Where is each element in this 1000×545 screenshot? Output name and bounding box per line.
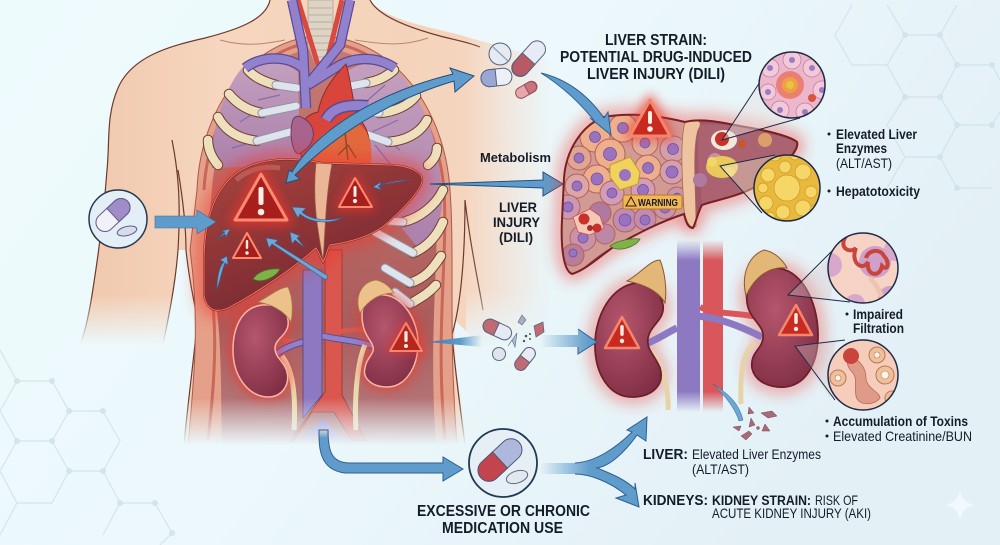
warning badge xyxy=(623,195,682,209)
warning triangle: magnified liver xyxy=(629,98,671,136)
skin: arms and shoulders xyxy=(80,0,550,445)
hexagon pattern: top right xyxy=(835,5,1000,191)
right panel adrenal right xyxy=(744,250,787,296)
text: liver outcome: LIVER: xyxy=(643,446,688,463)
liver in body xyxy=(204,159,422,310)
heart xyxy=(291,64,371,172)
text: liver effects: Hepatotoxicity xyxy=(836,183,920,199)
label: liver injury: LIVER xyxy=(499,199,537,215)
trachea xyxy=(308,0,333,66)
right panel ureters xyxy=(652,343,755,410)
kidney right glow xyxy=(362,295,418,387)
damaged hepatocytes xyxy=(573,209,604,235)
inset: tubule xyxy=(795,340,899,410)
text: liver outcome: (ALT/AST) xyxy=(692,461,749,477)
great veins fill xyxy=(245,0,395,108)
arrow: bottom elbow xyxy=(319,430,463,481)
text: toxins xyxy=(826,413,972,444)
text: kidney outcome xyxy=(643,492,871,521)
text: impaired filtration: Impaired xyxy=(853,306,903,322)
text: liver effects: Enzymes xyxy=(836,140,887,156)
pills: fragmented xyxy=(481,315,544,373)
text: liver effects: (ALT/AST) xyxy=(836,155,892,171)
warning badge: WARNING xyxy=(638,198,678,209)
text: toxins: Elevated Creatinine/BUN xyxy=(833,428,972,444)
great veins xyxy=(245,0,395,108)
lung right xyxy=(345,62,442,250)
kidney right xyxy=(362,295,418,387)
warning triangle: body kidney xyxy=(389,322,423,351)
heading: liver strain: LIVER STRAIN: xyxy=(605,32,707,49)
inset: inflamed tissue xyxy=(722,51,831,140)
liver glow: magnified xyxy=(562,115,797,274)
body cavity wall xyxy=(188,36,457,445)
iliac veins xyxy=(302,418,341,440)
warning triangle: small xyxy=(233,233,261,258)
human torso illustration xyxy=(80,0,550,445)
arrows: forked outcome xyxy=(541,417,647,507)
arrow head outline xyxy=(578,329,597,354)
gallbladder xyxy=(253,269,280,281)
warning triangle: right lobe xyxy=(338,177,373,208)
arrow: arm to liver xyxy=(155,210,216,234)
arrow: pills to liver xyxy=(541,73,611,135)
kidney left glow xyxy=(233,305,288,397)
sparkle mark xyxy=(945,490,975,520)
text: kidney outcome: KIDNEY STRAIN: xyxy=(712,492,811,508)
heading: liver strain xyxy=(560,32,752,83)
inset: fatty tissue xyxy=(720,149,820,222)
text: kidney outcome: RISK OF xyxy=(815,492,858,508)
liver: magnified xyxy=(556,110,797,282)
small debris arrow xyxy=(713,384,743,421)
lung vessels xyxy=(232,85,400,170)
adrenal left xyxy=(258,287,292,322)
renal vessels xyxy=(282,330,372,342)
text: liver outcome xyxy=(643,446,821,477)
vena cava xyxy=(303,270,322,418)
medication icon: bottom xyxy=(469,429,537,497)
label: liver injury: (DILI) xyxy=(499,229,533,245)
text: impaired filtration: Filtration xyxy=(853,320,904,336)
text: kidney outcome: ACUTE KIDNEY INJURY (AKI) xyxy=(712,505,871,521)
left lobe shading xyxy=(698,124,797,205)
kidney left xyxy=(233,305,288,397)
arrow: pills to kidney xyxy=(540,329,597,354)
heading: liver strain: LIVER INJURY (DILI) xyxy=(587,66,725,83)
heading: excessive medication: EXCESSIVE OR CHRONIC xyxy=(417,503,590,520)
cavity inner xyxy=(206,48,437,445)
falciform band xyxy=(682,120,700,227)
collarbones xyxy=(220,38,428,44)
text: kidney outcome: KIDNEYS: xyxy=(643,492,708,509)
label: metabolism: Metabolism xyxy=(480,150,551,165)
diaphragm glow xyxy=(204,159,422,310)
hexagon pattern: bottom left xyxy=(0,350,175,545)
right panel adrenal left xyxy=(627,260,666,303)
inset: nephron xyxy=(787,232,899,304)
right panel renal vessels xyxy=(648,307,762,343)
debris fragments xyxy=(733,407,777,440)
heading: liver strain: POTENTIAL DRUG-INDUCED xyxy=(560,49,752,66)
label: liver injury: INJURY xyxy=(493,214,541,230)
lower dark lobe edge xyxy=(584,248,610,267)
warning triangle: large xyxy=(233,172,289,222)
text: impaired filtration xyxy=(846,306,904,336)
warning triangle: kidney panel left xyxy=(605,317,639,348)
text: liver effects: Elevated Liver xyxy=(836,126,917,142)
lung left xyxy=(212,60,300,168)
necrosis and fat spots on left lobe xyxy=(693,130,772,187)
skin outline xyxy=(80,0,483,445)
kidney panel: vessels xyxy=(677,240,723,412)
adrenal right xyxy=(358,280,394,313)
text: liver effects xyxy=(828,126,920,199)
arrow: liver to pills xyxy=(286,68,474,183)
gallbladder: magnified xyxy=(610,239,640,249)
heading: excessive medication: MEDICATION USE xyxy=(442,520,563,537)
ureters xyxy=(282,345,365,430)
muscle stripes xyxy=(204,42,445,440)
aorta xyxy=(290,250,366,441)
heading: excessive medication xyxy=(417,503,590,537)
arrow: metabolism xyxy=(430,172,563,196)
small flow arrows on liver xyxy=(216,180,411,290)
neck arteries xyxy=(298,0,342,65)
warning triangle: kidney panel right xyxy=(779,305,812,335)
fatty hepatocyte xyxy=(610,157,640,190)
pills: top xyxy=(480,37,549,100)
right panel kidney left xyxy=(595,283,663,397)
medication icon: arm xyxy=(89,190,147,248)
label: liver injury xyxy=(493,199,541,245)
right panel kidney glow xyxy=(595,268,818,397)
right panel kidney right xyxy=(747,268,818,387)
rib cage xyxy=(208,70,443,304)
arrow: kidney to pills left xyxy=(428,335,482,347)
text: toxins: Accumulation of Toxins xyxy=(833,413,968,429)
text: liver outcome: Elevated Liver Enzymes xyxy=(692,446,821,462)
